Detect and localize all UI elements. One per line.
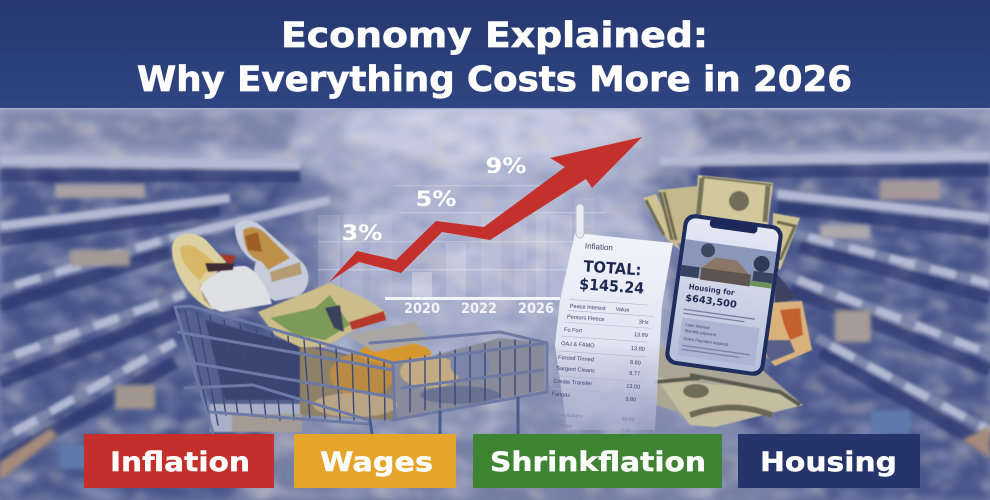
groceries: bread bag (172, 234, 226, 310)
phone screen (668, 217, 780, 373)
percentage labels: 9% (486, 154, 526, 178)
receipt: Tax rated (553, 460, 574, 467)
listing details: Monthly payment (684, 328, 717, 337)
receipt: Sargent Cleans (556, 366, 595, 374)
listing details (677, 309, 761, 366)
receipt paper (555, 233, 673, 430)
receipt: 3.80 (625, 397, 636, 403)
listing details: Loan Interest (685, 322, 711, 330)
groceries: chip bag (235, 220, 308, 301)
receipt: $0.80 (620, 439, 633, 446)
receipt: Pentors Fleece (567, 314, 605, 323)
receipt: 13.89 (634, 332, 648, 339)
dollar bills (643, 175, 812, 427)
dark wallet behind phone (775, 272, 798, 305)
groceries: salad package (258, 283, 387, 347)
receipt: 13.00 (626, 384, 640, 391)
category label: Shrinkflation: Shrinkflation (490, 447, 706, 478)
colourful banknote right of phone (755, 301, 812, 366)
receipt: 8.80 (630, 360, 641, 367)
title line 1: Economy Explained: (281, 16, 708, 56)
shopping cart wire frame (175, 306, 547, 434)
left shelves (0, 160, 330, 462)
receipt: Create Transfer (553, 379, 593, 387)
red arrow (329, 137, 642, 282)
category label: Shrinkflation (473, 434, 722, 488)
year labels: 2020 (404, 301, 440, 317)
listing heading: Housing for (688, 282, 735, 297)
percentage labels: 5% (416, 187, 456, 211)
category label: Inflation (84, 434, 274, 488)
percentage labels: 3% (342, 221, 382, 245)
chart axis (385, 297, 560, 300)
receipt: TOTAL: (583, 257, 642, 279)
year labels: 2022 (461, 301, 497, 317)
receipt (547, 204, 673, 472)
pin clip (576, 204, 584, 238)
receipt: Tender (557, 423, 573, 430)
listing price: $643,500 (684, 293, 738, 311)
category label: Wages (294, 434, 456, 488)
phone body (664, 213, 784, 377)
cart rails (175, 306, 547, 420)
mottled product texture (0, 110, 990, 500)
year labels: 2026 (518, 301, 554, 317)
year labels (404, 301, 554, 317)
receipt: Total owed (553, 448, 578, 455)
right shelves (660, 156, 990, 448)
title banner (0, 0, 990, 110)
receipt: $145.24 (579, 275, 645, 298)
receipt: Peace Interest (569, 304, 606, 312)
basket contents: dark interior and produce (178, 312, 545, 432)
receipt: 13.80 (631, 346, 645, 353)
phone notch (709, 218, 758, 234)
receipt: Fu Fort (564, 327, 583, 335)
receipt: Inflation (585, 241, 613, 252)
smartphone housing listing (664, 213, 784, 377)
receipt: 3Hz (639, 319, 649, 326)
category label: Wages: Wages (320, 447, 433, 478)
title line 2: Why Everything Costs More in 2026 (137, 60, 852, 100)
receipt: 3.80 (614, 464, 625, 471)
receipt: Fangas (551, 392, 571, 399)
receipt: 7.80 (621, 427, 631, 434)
bills fanned behind phone (643, 175, 800, 270)
groceries in cart (172, 220, 547, 434)
category label: Housing (738, 434, 920, 488)
category label: Inflation: Inflation (110, 447, 250, 478)
receipt: Transaction (552, 435, 579, 443)
receipt: Transactions (554, 412, 583, 420)
bills under phone (655, 345, 803, 427)
groceries: white jug (200, 254, 272, 312)
receipt: Forced Tinned (558, 355, 594, 363)
receipt: $0.80 (622, 416, 635, 423)
listing details: Down Payment required (683, 336, 729, 347)
receipt: OAJ & FAMO (561, 341, 595, 349)
receipt: 8.77 (629, 371, 640, 378)
product accents (0, 180, 990, 480)
chart grid bars behind arrow (318, 185, 605, 298)
percentage labels (342, 154, 526, 245)
rising inflation line chart (329, 137, 642, 317)
receipt: Value (615, 307, 630, 314)
category label: Housing: Housing (760, 447, 897, 478)
house photo (680, 239, 777, 290)
receipt: 3.80 (615, 452, 626, 459)
